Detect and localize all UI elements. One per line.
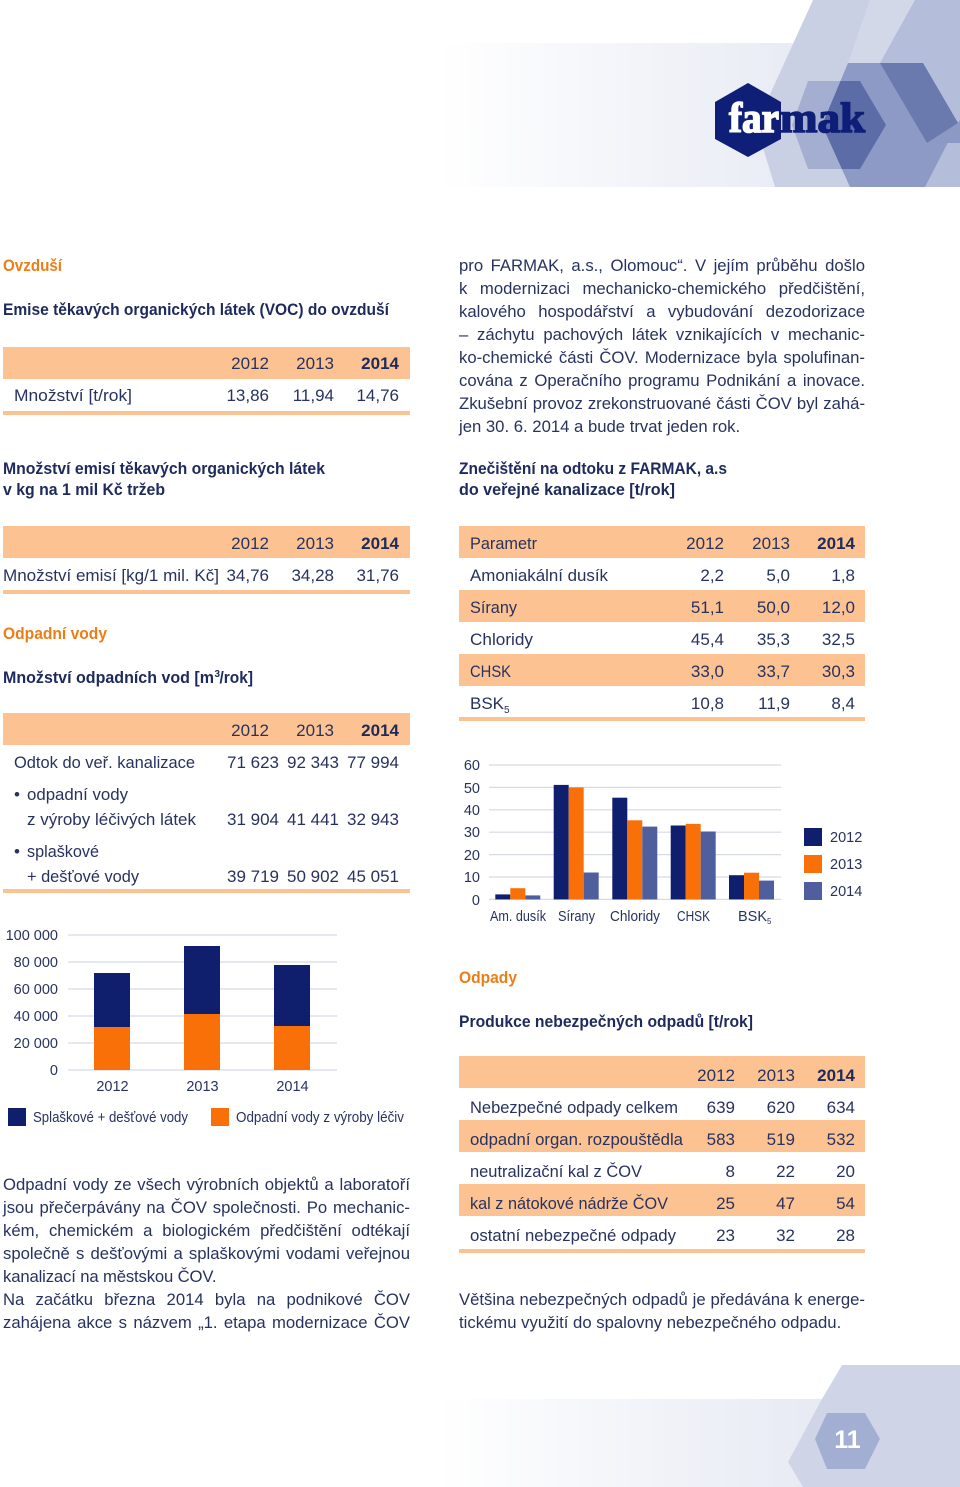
table: hazardous waste: 639 — [707, 1098, 735, 1117]
heading: pollution at outflow — [459, 459, 727, 499]
table: hazardous waste: kal z nátokové nádrže ČOV — [470, 1194, 669, 1213]
table: hazardous waste: 54 — [836, 1194, 855, 1213]
text block: modernization continued: – záchytu pachových látek vznikajících v mechanic- — [459, 325, 865, 344]
table: pollution parameters: 2014 — [817, 534, 856, 553]
heading: pollution at outflow: Znečištění na odtoku z FARMAK, a.s — [459, 459, 727, 478]
text block: wastewater description: Na začátku března 2014 byla na podnikové ČOV — [3, 1290, 410, 1309]
bar chart: pollution parameters: 40 — [464, 803, 480, 819]
table: wastewater: z výroby léčivých látek — [27, 810, 196, 829]
table: hazardous waste: 20 — [836, 1162, 855, 1181]
table: pollution parameters: 5,0 — [766, 566, 790, 585]
text block: wastewater description — [2, 1175, 410, 1332]
table: wastewater: 77 994 — [347, 753, 399, 772]
logo: farmak: mak — [780, 96, 866, 142]
table: pollution parameters: 33,7 — [757, 662, 790, 681]
bar chart: pollution parameters: BSK — [738, 909, 767, 925]
text block: modernization continued: pro FARMAK, a.s., Olomouc“. V jejím průběhu došlo — [459, 256, 865, 275]
table: pollution parameters: 5 — [504, 705, 510, 716]
footer decoration — [440, 1365, 960, 1487]
text block: wastewater description: jsou přečerpávány na ČOV společnosti. Po mechanic- — [3, 1198, 410, 1217]
table: pollution parameters: 8,4 — [831, 694, 855, 713]
table: wastewater: 45 051 — [347, 867, 399, 886]
table: pollution parameters: Chloridy — [470, 630, 534, 649]
table: wastewater: • — [14, 842, 20, 861]
text block: modernization continued: Zkušební provoz zrekonstruované části ČOV byl zahá- — [459, 394, 865, 413]
text block: wastewater description: kanalizací na městskou ČOV. — [3, 1267, 216, 1286]
table: pollution parameters: 51,1 — [691, 598, 724, 617]
text block: wastewater description: Odpadní vody ze všech výrobních objektů a laboratoří — [3, 1175, 410, 1194]
bar chart: pollution parameters: 60 — [464, 758, 480, 774]
table: hazardous waste: 620 — [767, 1098, 795, 1117]
table: wastewater: 92 343 — [287, 753, 339, 772]
table: VOC emissions: 14,76 — [356, 386, 399, 405]
table: wastewater: 32 943 — [347, 810, 399, 829]
heading: hazardous waste: Produkce nebezpečných odpadů [t/rok] — [459, 1012, 753, 1031]
heading: VOC emissions: Emise těkavých organických látek (VOC) do ovzduší — [3, 300, 390, 319]
text block: modernization continued: cována z Operačního programu Podnikání a inovace. — [459, 371, 865, 390]
table: pollution parameters: 10,8 — [691, 694, 724, 713]
bar chart: pollution parameters: 50 — [464, 781, 480, 797]
legend: wastewater chart: Odpadní vody z výroby léčiv — [236, 1110, 405, 1126]
bar chart: pollution parameters: CHSK — [677, 909, 710, 925]
stacked bar chart: wastewater: 2013 — [186, 1079, 219, 1095]
table: wastewater: 41 441 — [287, 810, 339, 829]
text block: hazardous waste note: tickému využití do spalovny nebezpečného odpadu. — [459, 1313, 841, 1332]
bar chart: pollution parameters: 10 — [464, 870, 480, 886]
stacked bar chart: wastewater: 60 000 — [14, 982, 58, 998]
legend: wastewater chart — [8, 1108, 405, 1126]
table: hazardous waste: ostatní nebezpečné odpady — [470, 1226, 676, 1245]
legend: wastewater chart: Splaškové + dešťové vody — [33, 1110, 189, 1126]
text block: wastewater description: společně s dešťovými a splaškovými vodami veřejnou — [3, 1244, 410, 1263]
table: wastewater: 2012 — [231, 721, 269, 740]
stacked bar chart: wastewater: 100 000 — [6, 928, 58, 944]
table: VOC emissions: Množství [t/rok] — [14, 386, 132, 405]
table: pollution parameters: 2,2 — [700, 566, 724, 585]
table: hazardous waste: 634 — [827, 1098, 855, 1117]
table: wastewater: • — [14, 785, 20, 804]
table: pollution parameters: 50,0 — [757, 598, 790, 617]
table: pollution parameters: 33,0 — [691, 662, 724, 681]
bar chart: pollution parameters: Sírany — [558, 909, 596, 925]
legend: pollution chart: 2013 — [830, 857, 862, 873]
table: hazardous waste: 23 — [716, 1226, 735, 1245]
table: emissions per revenue: 2014 — [361, 534, 400, 553]
bar chart: pollution parameters — [464, 758, 781, 926]
table: pollution parameters: 32,5 — [822, 630, 855, 649]
stacked bar chart: wastewater: 2012 — [96, 1079, 129, 1095]
table: hazardous waste: 25 — [716, 1194, 735, 1213]
stacked bar chart: wastewater — [6, 928, 337, 1095]
table: hazardous waste: 32 — [776, 1226, 795, 1245]
logo: farmak: far — [729, 96, 779, 142]
table: pollution parameters: CHSK — [470, 662, 512, 681]
bar chart: pollution parameters: Chloridy — [610, 909, 661, 925]
table: hazardous waste: odpadní organ. rozpouštědla — [470, 1130, 684, 1149]
table: pollution parameters: BSK — [470, 694, 504, 713]
bar chart: pollution parameters: Am. dusík — [490, 909, 547, 925]
heading: VOC per revenue: Množství emisí těkavých organických látek — [3, 459, 325, 478]
legend: pollution chart: 2014 — [830, 884, 862, 900]
table: hazardous waste: 519 — [767, 1130, 795, 1149]
table: wastewater — [3, 713, 410, 893]
heading: VOC per revenue — [3, 459, 325, 499]
table: pollution parameters: Parametr — [470, 534, 537, 553]
table: hazardous waste: 22 — [776, 1162, 795, 1181]
table: pollution parameters: Amoniakální dusík — [470, 566, 608, 585]
heading: pollution at outflow: do veřejné kanalizace [t/rok] — [459, 480, 675, 499]
heading: Odpady: Odpady — [459, 968, 517, 987]
table: pollution parameters: 11,9 — [758, 694, 790, 713]
table: wastewater: splaškové — [27, 842, 99, 861]
table: wastewater: 71 623 — [227, 753, 279, 772]
table: emissions per revenue: 31,76 — [356, 566, 399, 585]
stacked bar chart: wastewater: 20 000 — [14, 1036, 58, 1052]
table: emissions per revenue: 2012 — [231, 534, 269, 553]
table: hazardous waste: neutralizační kal z ČOV — [470, 1162, 643, 1181]
table: hazardous waste: 28 — [836, 1226, 855, 1245]
table: wastewater: 39 719 — [227, 867, 279, 886]
table: hazardous waste: Nebezpečné odpady celkem — [470, 1098, 678, 1117]
page number badge — [815, 1413, 880, 1469]
text block: wastewater description: kém, chemickém a biologickém předčištění odtékají — [3, 1221, 410, 1240]
logo: farmak — [715, 83, 866, 157]
heading: wastewater volume: /rok] — [220, 668, 253, 687]
table: hazardous waste: 2014 — [817, 1066, 856, 1085]
table: emissions per revenue: Množství emisí [kg/1 mil. Kč] — [3, 566, 219, 585]
stacked bar chart: wastewater: 40 000 — [14, 1009, 58, 1025]
table: wastewater: Odtok do veř. kanalizace — [14, 753, 195, 772]
table: pollution parameters: 35,3 — [757, 630, 790, 649]
table: wastewater: 2013 — [296, 721, 334, 740]
table: emissions per revenue: 34,28 — [291, 566, 334, 585]
table: pollution parameters: 45,4 — [691, 630, 724, 649]
table: hazardous waste: 47 — [776, 1194, 795, 1213]
table: hazardous waste: 8 — [726, 1162, 735, 1181]
heading: wastewater volume: 3 — [214, 669, 220, 680]
table: pollution parameters: 30,3 — [822, 662, 855, 681]
table: VOC emissions: 13,86 — [226, 386, 269, 405]
bar chart: pollution parameters: 30 — [464, 825, 480, 841]
table: emissions per revenue — [3, 526, 410, 594]
table: pollution parameters: Sírany — [470, 598, 517, 617]
heading: VOC per revenue: v kg na 1 mil Kč tržeb — [3, 480, 165, 499]
text block: modernization continued — [458, 256, 865, 436]
table: hazardous waste: 583 — [707, 1130, 735, 1149]
table: pollution parameters: 2013 — [752, 534, 790, 553]
table: VOC emissions — [3, 347, 410, 415]
table: wastewater: + dešťové vody — [27, 867, 139, 886]
legend: pollution chart — [804, 828, 862, 900]
text block: modernization continued: kalového hospodářství a vybudování dezodorizace — [459, 302, 865, 321]
bar chart: pollution parameters: 5 — [767, 917, 772, 926]
table: pollution parameters: 1,8 — [831, 566, 855, 585]
bar chart: pollution parameters: 0 — [472, 893, 480, 909]
table: wastewater: 50 902 — [287, 867, 339, 886]
table: pollution parameters: 12,0 — [822, 598, 855, 617]
table: wastewater: odpadní vody — [27, 785, 128, 804]
page number badge: 11 — [834, 1426, 861, 1454]
table: VOC emissions: 11,94 — [293, 386, 334, 405]
text block: modernization continued: ko-chemické části ČOV. Modernizace byla spolufinan- — [459, 348, 865, 367]
table: wastewater: 2014 — [361, 721, 400, 740]
table: hazardous waste: 532 — [827, 1130, 855, 1149]
header decoration — [440, 0, 960, 187]
table: hazardous waste: 2013 — [757, 1066, 795, 1085]
bar chart: pollution parameters: 20 — [464, 848, 480, 864]
table: pollution parameters — [459, 526, 865, 721]
stacked bar chart: wastewater: 2014 — [276, 1079, 309, 1095]
table: pollution parameters: 2012 — [686, 534, 724, 553]
stacked bar chart: wastewater: 0 — [50, 1063, 58, 1079]
heading: Ovzduší: Ovzduší — [3, 256, 63, 275]
stacked bar chart: wastewater: 80 000 — [14, 955, 58, 971]
text block: wastewater description: zahájena akce s názvem „1. etapa modernizace ČOV — [3, 1313, 410, 1332]
heading: Odpadní vody: Odpadní vody — [3, 624, 107, 643]
heading: wastewater volume: Množství odpadních vod [m — [3, 668, 214, 687]
table: emissions per revenue: 34,76 — [226, 566, 269, 585]
table: hazardous waste — [459, 1056, 865, 1253]
text block: hazardous waste note — [459, 1290, 865, 1332]
table: VOC emissions: 2014 — [361, 354, 400, 373]
table: VOC emissions: 2012 — [231, 354, 269, 373]
table: emissions per revenue: 2013 — [296, 534, 334, 553]
text block: modernization continued: k modernizaci mechanicko-chemického předčištění, — [459, 279, 865, 298]
text block: modernization continued: jen 30. 6. 2014 a bude trvat jeden rok. — [459, 417, 740, 436]
table: wastewater: 31 904 — [227, 810, 279, 829]
table: hazardous waste: 2012 — [697, 1066, 735, 1085]
text block: hazardous waste note: Většina nebezpečných odpadů je předávána k energe- — [459, 1290, 865, 1309]
table: VOC emissions: 2013 — [296, 354, 334, 373]
legend: pollution chart: 2012 — [830, 830, 862, 846]
